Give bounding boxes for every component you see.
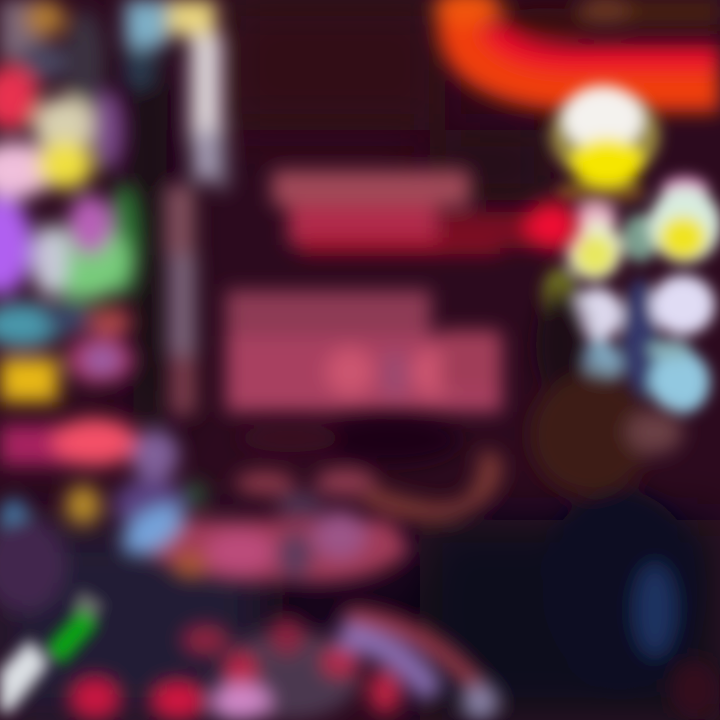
dark arch under sign: [240, 416, 460, 464]
woman hair and hand: [360, 295, 720, 720]
yellow white bulbs right: [542, 86, 720, 414]
upper red sign: [272, 170, 578, 254]
roulette wheel with red dots: [69, 616, 498, 720]
left slot machine: [0, 0, 141, 402]
casino table and colour pads: [0, 418, 410, 613]
green and white buttons: [0, 590, 104, 712]
neon red ring top right: [434, 0, 720, 88]
large pink sign: [226, 290, 502, 412]
vertical light column: [124, 0, 229, 415]
